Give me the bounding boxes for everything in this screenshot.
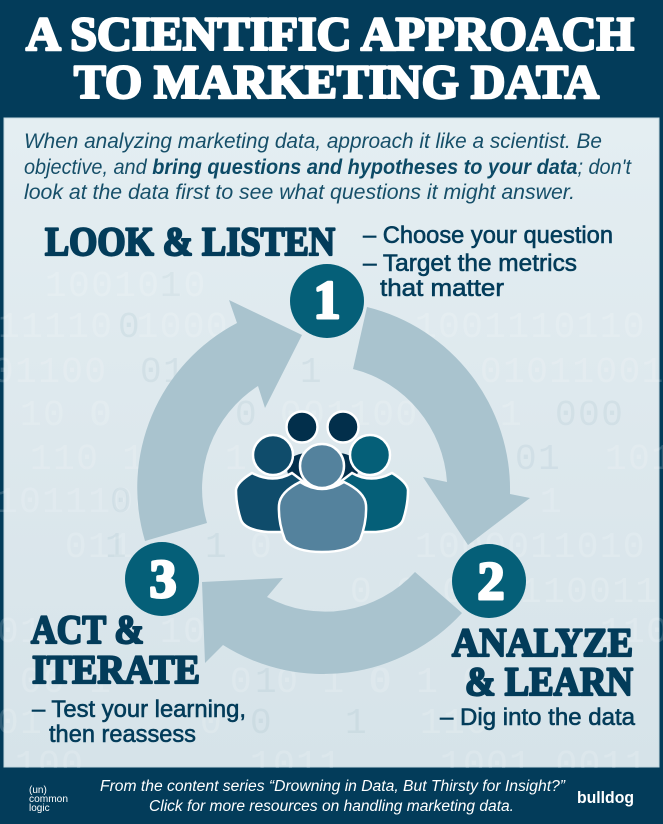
background binary digits: 1 xyxy=(105,527,128,568)
background binary digits: 0 xyxy=(250,527,273,568)
footer band xyxy=(0,768,663,824)
background binary digits: 011 xyxy=(65,527,134,568)
background binary digits: 10 0 xyxy=(20,395,112,436)
intro text xyxy=(24,130,632,204)
logo: uncommon logic: (un) xyxy=(29,785,47,796)
logo: uncommon logic xyxy=(29,785,68,814)
step 3 bullets: then reassess xyxy=(49,721,196,748)
background binary digits: 1 xyxy=(540,482,563,523)
step 1 bullets: – Target the metrics xyxy=(363,250,577,277)
background binary digits: 110011 xyxy=(520,572,659,613)
background binary digits: 1 xyxy=(345,703,368,744)
left person xyxy=(236,435,312,532)
background binary digits: 1 xyxy=(225,439,248,480)
background binary digits: 1001110110 xyxy=(415,307,646,348)
title xyxy=(26,8,634,109)
background binary digits: 110 1 xyxy=(30,439,146,480)
background binary digits: 00 1 xyxy=(20,662,112,703)
background binary digits: 0 xyxy=(235,395,258,436)
back person left xyxy=(285,412,322,490)
step 3 bullets xyxy=(32,696,246,748)
right person xyxy=(332,435,408,532)
footer text: From the content series “Drowning in Data, But Thirsty for Insight?” xyxy=(100,778,566,795)
step 3 badge: 3 xyxy=(150,549,176,609)
background binary digits: 0 0 0 0 xyxy=(350,572,512,613)
background binary digits: 0 1 0 xyxy=(370,662,486,703)
background binary digits: 0 xyxy=(250,703,273,744)
background binary digits: 01011001 xyxy=(480,352,663,393)
background binary digits: 0 xyxy=(110,482,133,523)
intro text: objective, and bring questions and hypotheses to your data; don't xyxy=(24,156,632,179)
background binary digits: 10 xyxy=(160,612,206,653)
title: TO MARKETING DATA xyxy=(74,56,599,109)
heading: analyze and learn: ANALYZE xyxy=(452,620,633,665)
background binary digits: 1000011010 xyxy=(415,527,646,568)
background binary digits: 1 xyxy=(160,266,183,307)
step 1 badge xyxy=(290,264,364,338)
step 1 bullets: – Choose your question xyxy=(363,222,613,249)
background binary digits: 0 xyxy=(200,703,223,744)
center person xyxy=(279,444,366,552)
background binary digits: 0 xyxy=(118,307,141,348)
background binary digits: 0 xyxy=(90,395,113,436)
background binary digits: 000 xyxy=(555,395,624,436)
step 2 badge xyxy=(452,544,526,618)
background binary digits xyxy=(0,266,663,786)
step 2 bullet: – Dig into the data xyxy=(440,704,636,731)
background binary digits: 1011 xyxy=(250,745,342,786)
background binary digits: 100 xyxy=(15,745,84,786)
logo: uncommon logic: common xyxy=(29,794,68,805)
background binary digits: 01 xyxy=(515,439,561,480)
background binary digits: 01 xyxy=(140,352,186,393)
intro text: look at the data first to see what questions it might answer. xyxy=(24,181,575,204)
background binary digits: 1011100 xyxy=(0,482,158,523)
step 3 badge xyxy=(125,542,199,616)
step 1 bullets: that matter xyxy=(380,275,504,302)
step 1 bullets xyxy=(363,222,613,302)
arrow: step 1 to step 2 xyxy=(353,307,530,545)
background binary digits: 001100 xyxy=(280,395,419,436)
heading: act and iterate xyxy=(31,607,200,692)
background binary digits: 110 xyxy=(420,703,489,744)
background binary digits: 1001010 xyxy=(45,266,207,307)
intro text: When analyzing marketing data, approach it like a scientist. Be xyxy=(24,130,602,153)
footer text xyxy=(100,778,566,815)
logo: uncommon logic: logic xyxy=(29,803,50,814)
icon: group of people xyxy=(236,412,408,552)
heading: act and iterate: ITERATE xyxy=(32,647,200,692)
heading: analyze and learn xyxy=(452,620,633,704)
heading: act and iterate: ACT & xyxy=(31,607,144,652)
background binary digits: 1 xyxy=(205,527,228,568)
heading: look and listen: LOOK & LISTEN xyxy=(45,219,335,264)
panel: main background xyxy=(4,118,659,767)
heading: analyze and learn: & LEARN xyxy=(465,659,633,704)
background binary digits: 1001 0011 xyxy=(440,745,648,786)
background binary digits: 1 xyxy=(300,352,323,393)
step 1 badge: 1 xyxy=(314,270,340,330)
title: A SCIENTIFIC APPROACH xyxy=(26,8,634,61)
logo: bulldog: bulldog xyxy=(577,788,634,807)
step 2 badge: 2 xyxy=(478,551,504,611)
step 3 bullets: – Test your learning, xyxy=(32,696,246,723)
background binary digits: 11110 1000 xyxy=(0,307,229,348)
background binary digits: 0 0 1 0 xyxy=(230,662,392,703)
footer text: Click for more resources on handling marketing data. xyxy=(149,798,514,815)
arrow: step 2 to step 3 xyxy=(202,572,462,674)
background binary digits: 1 xyxy=(500,395,523,436)
arrow: step 3 to step 1 xyxy=(137,300,302,541)
back person right xyxy=(324,412,360,490)
background binary digits: 1 xyxy=(255,662,278,703)
